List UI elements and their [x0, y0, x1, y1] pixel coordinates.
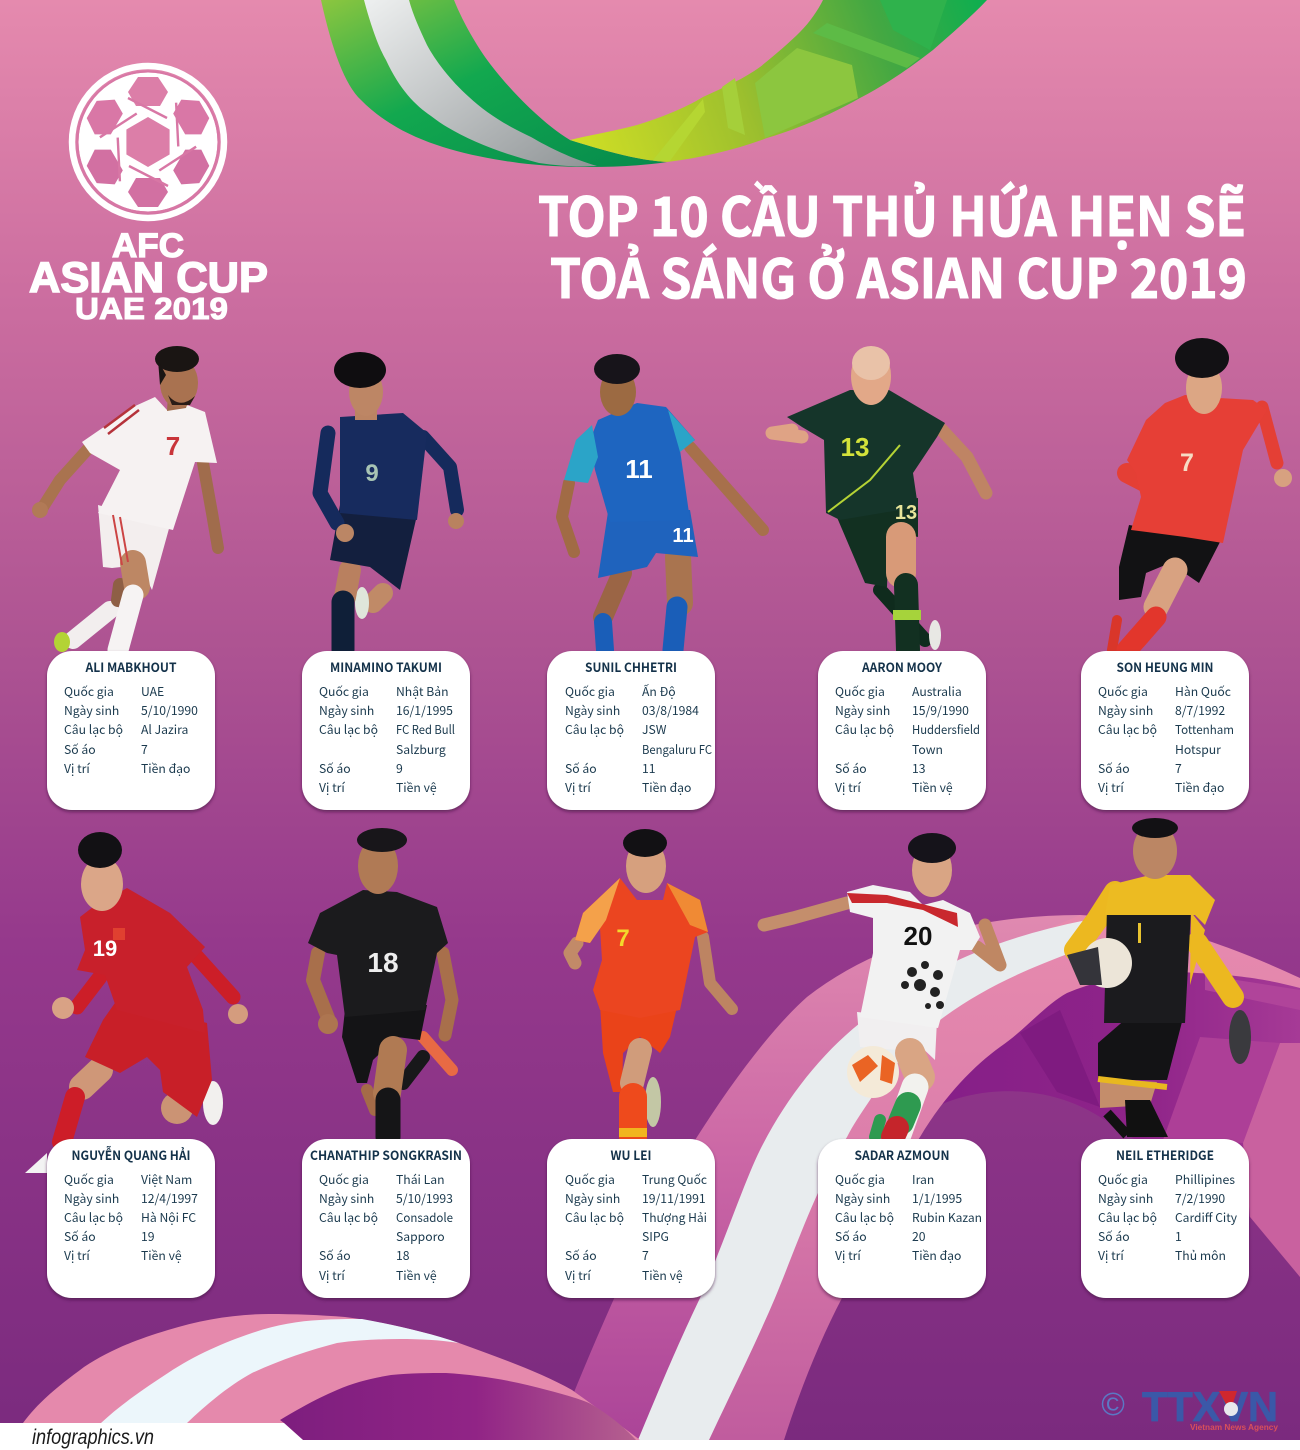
player photo: Aaron Mooy — [772, 346, 986, 650]
details — [319, 682, 455, 796]
card: Chanathip Songkrasin — [302, 1139, 470, 1298]
details: Thượng Hải — [642, 1208, 707, 1226]
details: 12/4/1997 — [141, 1189, 198, 1207]
details: 5/10/1993 — [396, 1189, 453, 1207]
details: Ngày sinh — [64, 701, 119, 719]
details: Vị trí — [1098, 778, 1124, 796]
details — [1098, 682, 1234, 796]
inner pink band — [700, 915, 1300, 1440]
details: Hotspur — [1175, 740, 1221, 758]
AFC Asian Cup logo — [29, 66, 268, 326]
details: 13 — [912, 759, 926, 777]
details: Tiền đạo — [642, 778, 691, 796]
details: Hàn Quốc — [1175, 682, 1231, 700]
arch interior shading — [940, 972, 1300, 1277]
title — [538, 173, 1247, 314]
details: Số áo — [319, 1246, 351, 1264]
details: Tiền vệ — [642, 1266, 683, 1284]
title line 2: TOẢ SÁNG Ở ASIAN CUP 2019 — [550, 235, 1247, 314]
name: SUNIL CHHETRI — [585, 657, 677, 676]
details: Tiền vệ — [141, 1246, 182, 1264]
details — [565, 1170, 707, 1284]
details: Câu lạc bộ — [1098, 720, 1157, 738]
details: Vị trí — [835, 1246, 861, 1264]
details: Tiền vệ — [396, 1266, 437, 1284]
details: Câu lạc bộ — [319, 720, 378, 738]
card: Neil Etheridge — [1081, 1139, 1249, 1298]
copyright mark: © — [1101, 1386, 1125, 1422]
details: Ngày sinh — [835, 701, 890, 719]
details: 7 — [141, 740, 148, 758]
player photo: Ali Mabkhout — [32, 346, 218, 652]
details: Câu lạc bộ — [565, 1208, 624, 1226]
emblem — [72, 66, 224, 218]
details: Quốc gia — [565, 682, 615, 700]
details — [64, 682, 198, 777]
details: Vị trí — [64, 759, 90, 777]
details: Câu lạc bộ — [565, 720, 624, 738]
player photo: Minamino Takumi — [320, 352, 464, 650]
details: Huddersfield — [912, 720, 980, 738]
details: Quốc gia — [565, 1170, 615, 1188]
details: Thái Lan — [396, 1170, 445, 1188]
details: Vị trí — [565, 778, 591, 796]
details — [835, 682, 980, 796]
card: Nguyen Quang Hai — [47, 1139, 215, 1298]
details: Ấn Độ — [642, 682, 676, 700]
details: Vị trí — [319, 778, 345, 796]
details: Phillipines — [1175, 1170, 1235, 1188]
details: Câu lạc bộ — [835, 720, 894, 738]
title line 1: TOP 10 CẦU THỦ HỨA HẸN SẼ — [538, 173, 1246, 252]
card: Minamino Takumi — [302, 651, 470, 810]
player photo: Aaron Mooy: 13 — [841, 432, 869, 462]
details: Rubin Kazan — [912, 1208, 982, 1226]
details — [64, 1170, 198, 1264]
name: ALI MABKHOUT — [85, 657, 176, 676]
logo text Asian Cup: ASIAN CUP — [29, 254, 268, 302]
details: Quốc gia — [64, 1170, 114, 1188]
details: Consadole — [396, 1208, 453, 1226]
details — [319, 1170, 453, 1284]
card: Sunil Chhetri — [547, 651, 715, 810]
player photo: Son Heung Min — [1112, 338, 1292, 650]
name: CHANATHIP SONGKRASIN — [310, 1145, 462, 1164]
details: Hà Nội FC — [141, 1208, 196, 1226]
details: 16/1/1995 — [396, 701, 453, 719]
logo text UAE 2019: UAE 2019 — [75, 291, 228, 326]
details: Câu lạc bộ — [64, 720, 123, 738]
player photo: Sardar Azmoun — [764, 833, 1000, 1137]
details: 7 — [1175, 759, 1182, 777]
white band — [638, 920, 1087, 1440]
details: 03/8/1984 — [642, 701, 699, 719]
bottom left arch ribbon — [23, 1314, 640, 1440]
details: Ngày sinh — [64, 1189, 119, 1207]
details: Số áo — [565, 759, 597, 777]
details: Việt Nam — [141, 1170, 192, 1188]
website credit: infographics.vn — [32, 1426, 154, 1449]
details: Ngày sinh — [1098, 701, 1153, 719]
details: Ngày sinh — [1098, 1189, 1153, 1207]
details: Quốc gia — [64, 682, 114, 700]
player photo: Wu Lei: 7 — [616, 925, 630, 952]
details: Câu lạc bộ — [64, 1208, 123, 1226]
details: Nhật Bản — [396, 682, 449, 700]
details: 7 — [642, 1246, 649, 1264]
player photo: Ali Mabkhout: 7 — [166, 431, 180, 461]
details: Số áo — [835, 1227, 867, 1245]
details: Town — [912, 740, 943, 758]
details: 20 — [912, 1227, 926, 1245]
player photo: Nguyen Quang Hai: 19 — [93, 936, 117, 961]
details: Al Jazira — [141, 720, 188, 738]
agency logo — [1101, 1383, 1278, 1432]
details: Tiền đạo — [141, 759, 190, 777]
details: Số áo — [835, 759, 867, 777]
details: UAE — [141, 682, 164, 700]
details: Bengaluru FC — [642, 740, 712, 758]
details — [565, 682, 712, 796]
details: 19 — [141, 1227, 155, 1245]
TTXVN wordmark: TTXVN — [1142, 1383, 1278, 1430]
details: FC Red Bull — [396, 720, 455, 738]
card: Sadar Azmoun — [818, 1139, 986, 1298]
details: Australia — [912, 682, 962, 700]
player photo: Nguyen Quang Hai — [25, 832, 248, 1173]
details: Trung Quốc — [642, 1170, 707, 1188]
details: 7/2/1990 — [1175, 1189, 1225, 1207]
details: Ngày sinh — [565, 1189, 620, 1207]
details: Salzburg — [396, 740, 446, 758]
details: 9 — [396, 759, 403, 777]
details: Quốc gia — [1098, 682, 1148, 700]
details: Cardiff City — [1175, 1208, 1238, 1226]
details: 1/1/1995 — [912, 1189, 962, 1207]
player photo: Sunil Chhetri: 11 — [672, 525, 694, 547]
agency emblem — [1219, 1391, 1238, 1416]
details: Tiền vệ — [396, 778, 437, 796]
details: Quốc gia — [319, 1170, 369, 1188]
player photo: Son Heung Min: 7 — [1180, 449, 1194, 477]
details: Ngày sinh — [319, 701, 374, 719]
player photo: Sunil Chhetri: 11 — [625, 454, 653, 484]
outer pink band — [555, 915, 1090, 1440]
player photo: Sunil Chhetri — [562, 354, 763, 650]
details — [1098, 1170, 1238, 1264]
details: 5/10/1990 — [141, 701, 198, 719]
details: 19/11/1991 — [642, 1189, 706, 1207]
details: Ngày sinh — [565, 701, 620, 719]
details: 11 — [642, 759, 656, 777]
details: Tiền đạo — [1175, 778, 1224, 796]
card: Ali Mabkhout — [47, 651, 215, 810]
details: Số áo — [565, 1246, 597, 1264]
player photo: Chanathip Songkrasin — [308, 828, 452, 1137]
details: 18 — [396, 1246, 410, 1264]
details: Số áo — [1098, 1227, 1130, 1245]
details: 15/9/1990 — [912, 701, 969, 719]
tagline: Vietnam News Agency — [1190, 1422, 1278, 1432]
details: Câu lạc bộ — [319, 1208, 378, 1226]
card: Aaron Mooy — [818, 651, 986, 810]
details: JSW — [642, 720, 667, 738]
details: Vị trí — [565, 1266, 591, 1284]
details: Thủ môn — [1175, 1246, 1226, 1264]
player photo: Wu Lei — [570, 829, 732, 1137]
player photo: Neil Etheridge — [1067, 818, 1251, 1137]
details: Tiền vệ — [912, 778, 953, 796]
details — [835, 1170, 982, 1264]
details: Vị trí — [1098, 1246, 1124, 1264]
details: Vị trí — [64, 1246, 90, 1264]
details: SIPG — [642, 1227, 669, 1245]
name: NEIL ETHERIDGE — [1116, 1145, 1214, 1164]
name: WU LEI — [610, 1145, 652, 1164]
details: Ngày sinh — [319, 1189, 374, 1207]
details: Tottenham — [1175, 720, 1234, 738]
name: AARON MOOY — [861, 657, 942, 676]
right arch ribbon — [555, 915, 1300, 1440]
details: 1 — [1175, 1227, 1182, 1245]
logo text AFC: AFC — [112, 227, 184, 265]
details: Câu lạc bộ — [835, 1208, 894, 1226]
bottom white strip — [0, 1423, 1300, 1450]
name: SON HEUNG MIN — [1116, 657, 1214, 676]
details: Tiền đạo — [912, 1246, 961, 1264]
details: 8/7/1992 — [1175, 701, 1225, 719]
details: Quốc gia — [319, 682, 369, 700]
name: SADAR AZMOUN — [854, 1145, 950, 1164]
details: Sapporo — [396, 1227, 445, 1245]
name: NGUYỄN QUANG HẢI — [72, 1145, 190, 1164]
details: Vị trí — [835, 778, 861, 796]
details: Vị trí — [319, 1266, 345, 1284]
details: Quốc gia — [1098, 1170, 1148, 1188]
details: Số áo — [1098, 759, 1130, 777]
player photo: Minamino Takumi: 9 — [365, 460, 379, 487]
name: MINAMINO TAKUMI — [330, 657, 442, 676]
top ribbon — [321, 0, 987, 167]
player photo: Aaron Mooy: 13 — [895, 502, 917, 524]
details: Iran — [912, 1170, 934, 1188]
details: Ngày sinh — [835, 1189, 890, 1207]
details: Số áo — [64, 1227, 96, 1245]
player photo: Chanathip Songkrasin: 18 — [367, 947, 399, 978]
card: Wu Lei — [547, 1139, 715, 1298]
details: Câu lạc bộ — [1098, 1208, 1157, 1226]
details: Quốc gia — [835, 1170, 885, 1188]
details: Số áo — [319, 759, 351, 777]
details: Số áo — [64, 740, 96, 758]
player photo: Sardar Azmoun: 20 — [904, 921, 932, 951]
details: Quốc gia — [835, 682, 885, 700]
card: Son Heung Min — [1081, 651, 1249, 810]
